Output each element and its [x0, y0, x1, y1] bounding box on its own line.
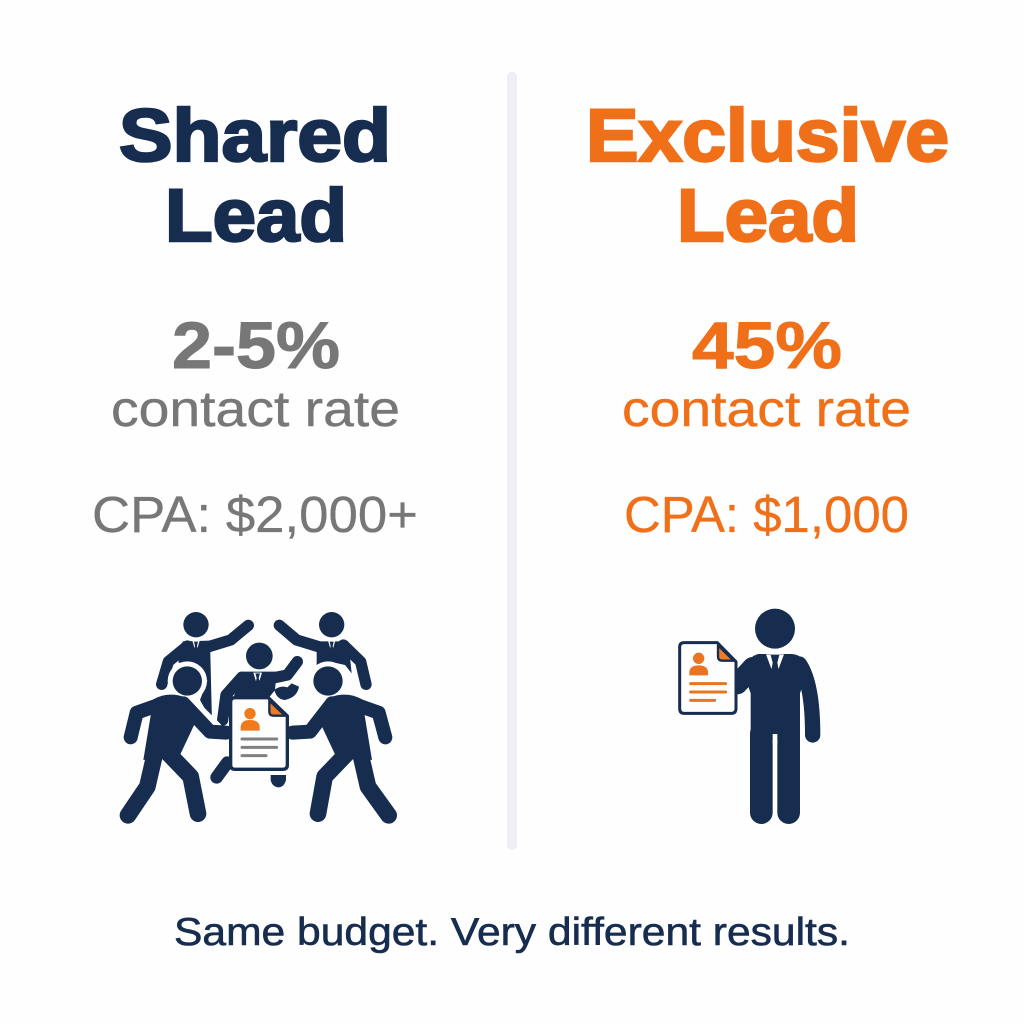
heading: Shared Lead: Shared — [119, 94, 391, 177]
heading: Exclusive Lead: Lead — [677, 174, 859, 257]
heading: Shared Lead: Lead — [165, 174, 347, 257]
label: contact rate: contact rate — [622, 381, 911, 437]
heading: Exclusive Lead — [586, 94, 949, 257]
heading: Shared Lead — [119, 94, 391, 257]
panel: shared lead — [92, 94, 418, 815]
stat: 2-5%: 2-5% — [172, 308, 340, 382]
footer caption: Same budget. Very different results. — [174, 911, 850, 954]
icon: crowd of people grabbing one lead — [128, 612, 389, 815]
middle person — [217, 643, 299, 787]
lead document — [231, 698, 287, 769]
heading: Exclusive Lead: Exclusive — [586, 94, 949, 177]
stat: CPA $1,000: CPA: $1,000 — [624, 486, 909, 543]
back right person — [279, 612, 366, 684]
back left person — [162, 612, 248, 722]
front left person — [128, 661, 226, 815]
panel: exclusive lead — [586, 94, 949, 813]
label: contact rate: contact rate — [111, 381, 400, 437]
stat: 45%: 45% — [692, 308, 842, 382]
lead document — [680, 643, 736, 713]
front right person — [293, 661, 389, 815]
icon: one person holding a lead — [680, 609, 813, 813]
stat: CPA $2,000+: CPA: $2,000+ — [92, 486, 418, 543]
person — [737, 609, 813, 813]
